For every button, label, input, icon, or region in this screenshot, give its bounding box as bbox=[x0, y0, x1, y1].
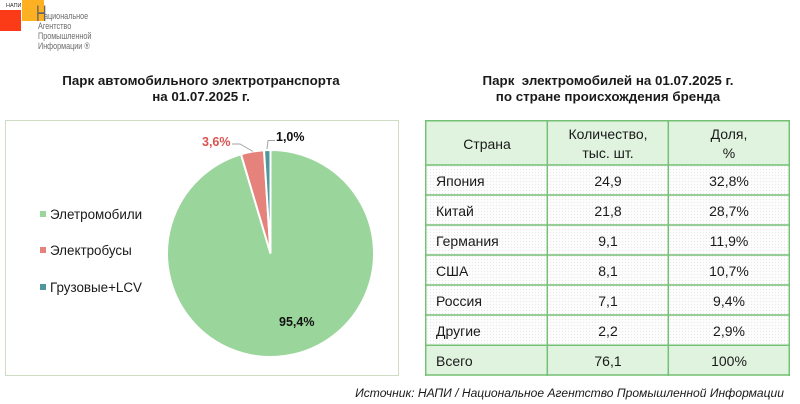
leader line: 3.6% bbox=[232, 144, 253, 152]
table body dotted background bbox=[426, 165, 790, 345]
table header background bbox=[426, 121, 790, 165]
heading: right table title bbox=[483, 73, 733, 104]
slice: electric cars 95.4% bbox=[167, 150, 374, 357]
header: share bbox=[710, 126, 747, 161]
legend swatch: trucks + LCV bbox=[40, 284, 46, 290]
row: Russia bbox=[436, 293, 745, 309]
row: China: Китай bbox=[436, 203, 474, 219]
row: Germany bbox=[436, 233, 748, 249]
header: country: Страна bbox=[463, 136, 511, 152]
logo: name line 4: Информации ® bbox=[38, 41, 90, 52]
row: China: 21,8 bbox=[594, 203, 622, 219]
row: Russia: 9,4% bbox=[713, 293, 745, 309]
logo: red square bbox=[0, 10, 21, 31]
leader line: 1.0% bbox=[267, 140, 275, 149]
heading: left chart title: на 01.07.2025 г. bbox=[152, 89, 250, 104]
heading: left chart title bbox=[62, 73, 340, 104]
header: quantity: тыс. шт. bbox=[582, 145, 634, 161]
heading: right table title: Парк электромобилей на 01.07.2025 г. bbox=[483, 73, 733, 88]
row: USA: США bbox=[436, 263, 468, 279]
legend swatch: electric cars bbox=[40, 211, 46, 217]
panel: pie chart bbox=[5, 120, 399, 376]
header: quantity bbox=[568, 126, 648, 161]
header: share: Доля, bbox=[711, 126, 747, 142]
logo: name line 2: Агентство bbox=[38, 20, 71, 32]
row: Total: Всего bbox=[436, 353, 473, 369]
heading: left chart title: Парк автомобильного электротранспорта bbox=[62, 73, 340, 88]
slice: trucks + LCV 1.0% bbox=[264, 150, 270, 254]
row: China bbox=[436, 203, 749, 219]
row: USA bbox=[436, 263, 749, 279]
pie chart bbox=[168, 140, 373, 356]
legend bbox=[40, 207, 142, 295]
row: China: 28,7% bbox=[709, 203, 749, 219]
row: Japan: 24,9 bbox=[594, 173, 622, 189]
row: Total bbox=[436, 353, 747, 369]
row: Other: Другие bbox=[436, 323, 481, 339]
row: Germany: 9,1 bbox=[598, 233, 618, 249]
header: quantity: Количество, bbox=[568, 126, 648, 142]
logo bbox=[0, 0, 91, 52]
legend label: trucks + LCV: Грузовые+LCV bbox=[50, 280, 142, 295]
slice: electric buses 3.6% bbox=[241, 150, 270, 254]
legend label: electric cars: Элетромобили bbox=[50, 207, 142, 222]
logo: name line 3: Промышленной bbox=[38, 30, 91, 42]
row: Japan: Япония bbox=[436, 173, 485, 189]
row: Japan: 32,8% bbox=[709, 173, 749, 189]
row: Germany: Германия bbox=[436, 233, 499, 249]
heading: right table title: по стране происхождения бренда bbox=[496, 89, 720, 104]
row: Total: 76,1 bbox=[594, 353, 622, 369]
logo: large letter: Н bbox=[36, 1, 46, 26]
source note: Источник: НАПИ / Национальное Агентство Промышленной Информации bbox=[355, 386, 784, 400]
logo: orange square bbox=[22, 0, 44, 21]
label: 95.4%: 95,4% bbox=[279, 315, 314, 329]
row: Russia: Россия bbox=[436, 293, 482, 309]
header: share: % bbox=[723, 145, 735, 161]
row: Germany: 11,9% bbox=[710, 233, 748, 249]
row: Russia: 7,1 bbox=[598, 293, 618, 309]
logo: name line 1: ациональное bbox=[44, 11, 88, 22]
table: EVs by brand origin bbox=[425, 120, 790, 376]
legend label: electric buses: Электробусы bbox=[50, 243, 132, 258]
row: USA: 8,1 bbox=[598, 263, 618, 279]
table grid bbox=[425, 120, 790, 376]
label: 1.0%: 1,0% bbox=[276, 130, 304, 144]
legend swatch: electric buses bbox=[40, 247, 46, 253]
label: 3.6%: 3,6% bbox=[202, 135, 230, 149]
row: Other: 2,9% bbox=[713, 323, 745, 339]
table total row background bbox=[426, 345, 790, 375]
row: Other bbox=[436, 323, 745, 339]
row: USA: 10,7% bbox=[709, 263, 749, 279]
row: Total: 100% bbox=[711, 353, 747, 369]
logo: small label: НАПИ bbox=[6, 3, 22, 9]
row: Other: 2,2 bbox=[598, 323, 618, 339]
row: Japan bbox=[436, 173, 749, 189]
